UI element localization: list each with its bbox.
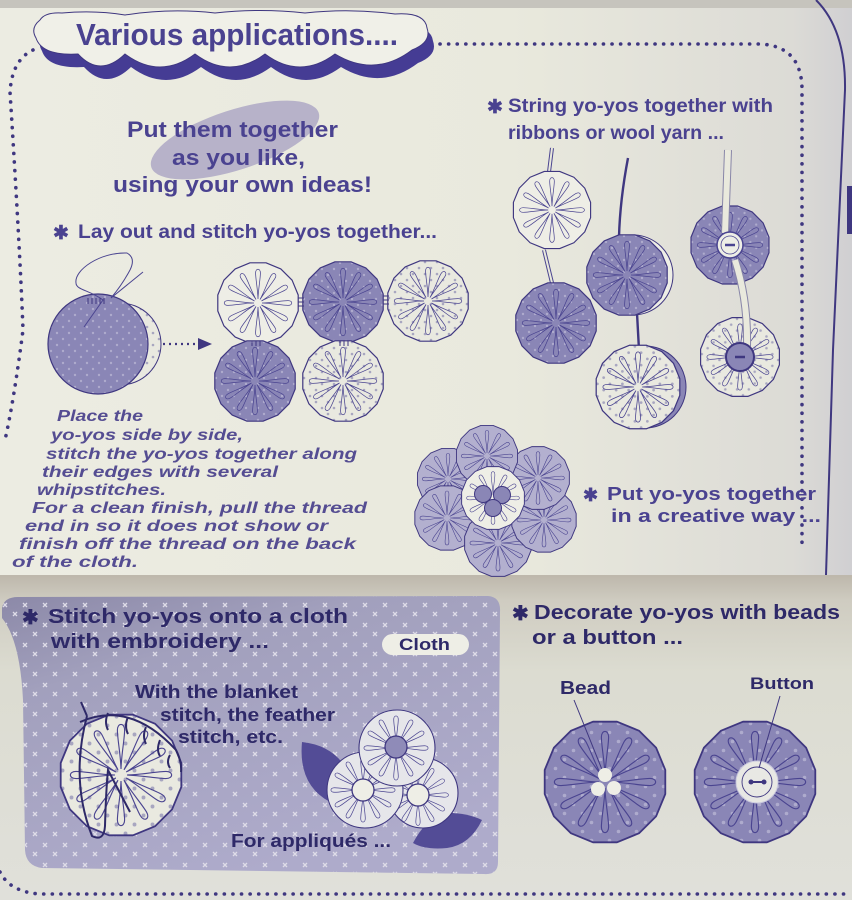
section heading: string: ribbons or wool yarn ... [508,123,724,144]
section heading: string: ✱ [487,97,503,118]
bead yo-yo [545,678,665,842]
leaf [302,742,344,802]
flower of yo-yos [415,425,576,576]
panel: cloth: with embroidery ... [50,631,269,653]
heading: ✱ [22,607,39,629]
bead yo-yo: Bead [560,678,611,698]
illustration: stitching two yo-yos [48,253,161,394]
panel: cloth: Cloth [399,635,450,654]
cloth print [2,596,500,874]
instructions text: For a clean finish, pull the thread [32,500,368,517]
intro heading: using your own ideas! [113,172,372,197]
arrow: dotted [163,338,212,350]
section heading: string: String yo-yos together with [508,96,773,117]
panel: cloth: stitch, the feather [160,705,335,725]
section heading: creative way [583,484,821,526]
panel: cloth [2,596,500,874]
instructions text: stitch the yo-yos together along [46,446,358,463]
right margin mark [847,186,852,234]
appliqué flowers [302,710,482,848]
highlight blob [142,84,328,196]
instructions text: their edges with several [42,464,279,481]
yo-yo grid [215,261,468,421]
intro heading [113,84,372,197]
buttons [717,232,743,258]
instructions text: Place the [57,408,143,425]
instructions text: yo-yos side by side, [50,427,243,444]
embroidered yo-yo [61,715,181,835]
instructions text: of the cloth. [12,554,138,571]
top edge shadow [0,0,852,8]
section heading: decorate: or a button ... [532,627,683,649]
section heading: decorate [512,602,840,649]
ribbons [544,148,553,287]
title banner [34,10,434,80]
applique note: For appliqués ... [231,830,391,851]
section heading: lay out: ✱ [53,223,69,244]
right page edge [816,0,845,575]
section heading: creative way: Put yo-yos together [607,484,816,504]
section heading: decorate: ✱ [512,603,529,625]
leaf [413,813,482,848]
instructions text: end in so it does not show or [25,518,329,535]
strung yo-yos [513,148,779,429]
title: Various applications.... [76,17,398,52]
lower fold shading [0,575,852,900]
section heading: creative way: in a creative way ... [611,506,821,526]
banner cloud [34,10,428,67]
section heading: decorate: Decorate yo-yos with beads [534,602,840,624]
section heading: creative way: ✱ [583,485,598,505]
instructions text [12,408,368,571]
panel: cloth: stitch, etc. [178,727,283,747]
stitch note: With the blanket [135,682,298,702]
intro heading: as you like, [172,145,305,170]
button yo-yo: Button [750,674,814,693]
button yo-yo [695,674,815,842]
instructions text: finish off the thread on the back [19,536,358,553]
banner shadow [40,24,434,80]
panel: cloth: Stitch yo-yos onto a cloth [48,606,348,628]
section heading: string [487,96,773,144]
section heading: lay out: Lay out and stitch yo-yos together... [78,222,437,243]
intro heading: Put them together [127,117,338,142]
instructions text: whipstitches. [37,482,166,499]
cloth label [382,634,469,655]
cloth fabric [2,596,500,874]
